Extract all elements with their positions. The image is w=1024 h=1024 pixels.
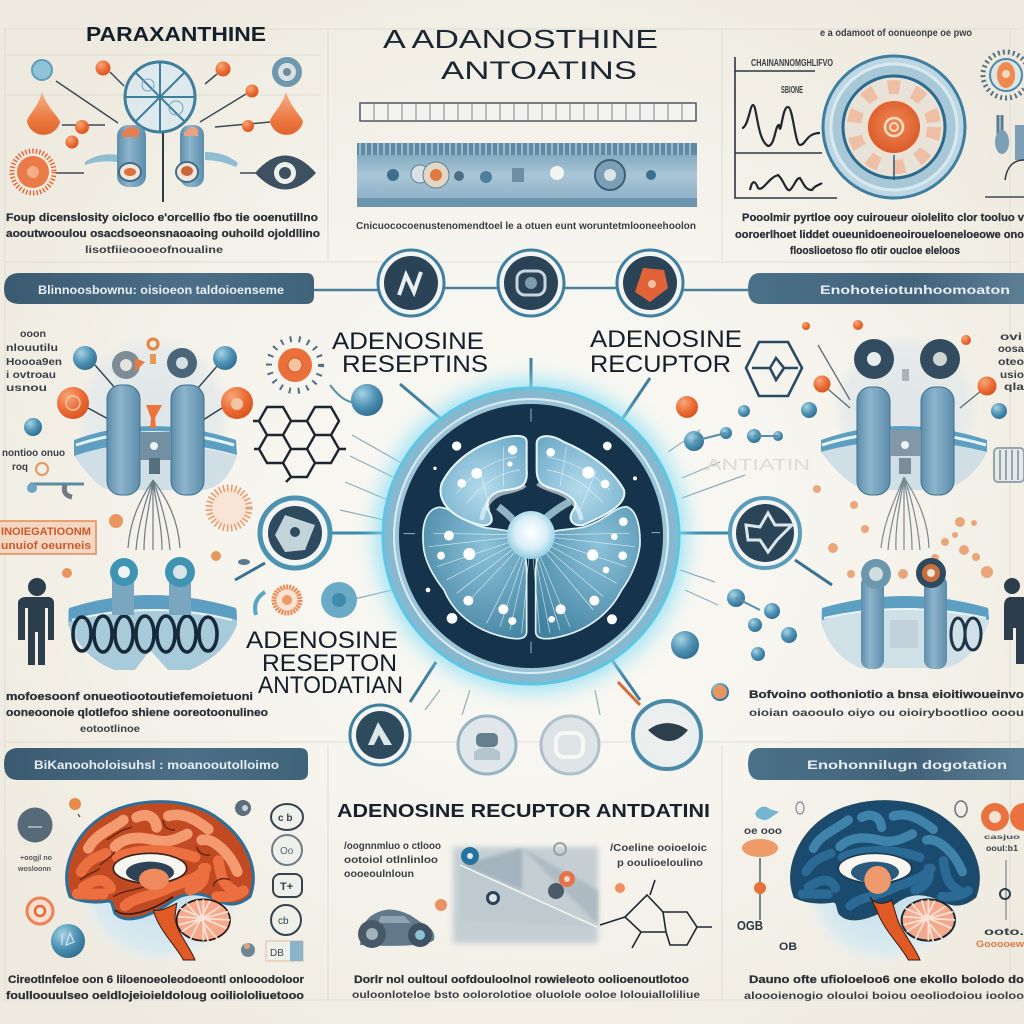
heading: adenosine resepton antodatian: ADENOSINE	[246, 627, 398, 654]
small text notes: Hoooa9en	[6, 357, 62, 368]
label: OGB: OGB	[737, 918, 763, 933]
icon: orange specks	[435, 883, 625, 911]
small text notes: oosa	[998, 344, 1024, 355]
small text note	[17, 855, 52, 873]
icon list: right side glyph badges: c b	[278, 813, 292, 824]
icon list: right side glyph badges: Oo	[280, 846, 294, 857]
icon list: right side glyph badges: cb	[278, 916, 289, 927]
chart: waveforms: CHAINANNOMGHLIFVO	[751, 58, 833, 69]
small text notes: qla	[1004, 382, 1024, 393]
small text notes: oteo	[998, 357, 1024, 368]
icon: orange target	[27, 898, 53, 924]
receptor stems	[861, 558, 947, 669]
icon: orange pin	[69, 798, 81, 817]
balls	[671, 402, 1007, 701]
fan of fibres	[128, 480, 180, 550]
node: top right	[617, 250, 683, 316]
node: bottom mid-left	[458, 716, 516, 774]
heading: adenosine receptins: RESEPTINS	[342, 351, 488, 378]
icon: dark lens	[235, 800, 251, 816]
links	[818, 345, 987, 408]
blue brain illustration	[792, 798, 978, 968]
text: left lower description: eotootlinoe	[80, 724, 140, 735]
text: left lower description	[6, 691, 268, 735]
icon: hexagon structure	[600, 880, 712, 948]
orange brain illustration	[67, 798, 253, 968]
text: paraxanthine description	[6, 212, 320, 256]
text: ruler caption: Cnicuococoenustenomendtoel le a otuen eunt woruntetmlooneehoolon	[356, 221, 696, 232]
text: blue brain description	[744, 974, 1024, 1002]
molecule links	[88, 365, 222, 420]
small text note: wosloonn	[17, 866, 51, 873]
panel: right upper receptor	[671, 320, 1024, 701]
small text notes: nlouutilu	[6, 343, 58, 354]
title: adenosine antagonists: ANTOATINS	[441, 57, 637, 85]
icon: sun near hexagons	[269, 339, 321, 391]
molecule links	[694, 433, 778, 610]
icon: left drop	[27, 92, 60, 135]
icon: hexagon outline	[746, 342, 802, 396]
header bar: bottom left: BiKanooholoisuhsl : moanooutolloimo	[34, 758, 279, 772]
membrane band	[74, 426, 237, 490]
chart: waveforms	[735, 57, 837, 198]
membrane disc	[73, 335, 233, 495]
receptor heads	[112, 339, 197, 379]
text: orange brain description: Cireotlnfeloe oon 6 liloenoeoleodoeontl onlooodoloor	[8, 974, 305, 986]
header bar: bottom right	[748, 748, 1024, 780]
header bar: bottom right: Enohonnilugn dogotation	[807, 758, 1007, 772]
small text notes	[2, 329, 65, 473]
text: gauge description: flooslioetoso flo otir oucloe eleloos	[790, 245, 960, 257]
receptor columns	[107, 385, 204, 495]
icon: central brain medallion	[375, 380, 687, 692]
callout: orange label	[0, 521, 96, 554]
title: adenosine antagonists	[383, 24, 658, 85]
receptor columns	[857, 387, 954, 495]
chart: waveforms: SBIONE	[781, 85, 803, 96]
heading: adenosine recuptor antdatini: ADENOSINE RECUPTOR ANTDATINI	[337, 801, 710, 821]
icon: mini receptor	[985, 115, 1024, 197]
text: left lower description: ooneoonoie qlotlefoo shiene ooreotoonulineo	[6, 707, 268, 719]
node: bottom left	[350, 705, 410, 765]
icon: person	[18, 578, 54, 665]
icon: outline top	[955, 801, 967, 817]
small text notes: usio	[1000, 370, 1024, 381]
text: right lower description: oioian oaooulo oiyo ou oioirybootlioo ooou	[749, 708, 1024, 719]
text: gauge description: Pooolmir pyrtloe ooy cuiroueur oiolelito clor tooluo v	[742, 212, 1024, 224]
icon: orange sun	[12, 151, 54, 193]
small text notes: i ovtroau	[6, 370, 56, 381]
title: Paraxanthine: PARAXANTHINE	[86, 24, 266, 46]
heading: adenosine receptins	[332, 328, 488, 378]
small text notes: ooon	[20, 329, 46, 340]
node: top centre	[498, 250, 564, 316]
icon: person	[1004, 578, 1024, 664]
icon: small indicator: DB	[270, 948, 284, 959]
icon: blue disc	[51, 924, 85, 958]
icon: teal lens	[321, 582, 357, 618]
small text and pins right	[976, 835, 1024, 949]
text: gauge description	[735, 212, 1024, 257]
bright dots	[426, 441, 637, 625]
small text left: oooeoulnloun	[344, 869, 414, 880]
text: blue brain description: aloooienogio olouloi boiou oeoliodoiou iooloo	[744, 991, 1024, 1002]
heading: adenosine resepton antodatian: RESEPTON	[262, 650, 397, 677]
panel: paraxanthine receptor	[12, 57, 316, 202]
small text right	[610, 843, 707, 869]
coil	[951, 618, 981, 650]
icon: dotted orange cell	[209, 488, 249, 528]
small text notes: ovi	[1000, 332, 1022, 343]
cell strip	[360, 103, 696, 121]
icon: orange blob on stem	[742, 826, 782, 920]
node: bottom right	[633, 701, 701, 769]
icon: circular gauge	[823, 56, 965, 198]
small text left	[344, 841, 441, 880]
icon: ring	[554, 843, 566, 855]
icon list: right side glyph badges	[271, 804, 303, 935]
orange ligand	[146, 405, 162, 428]
icon: side grille	[994, 448, 1024, 482]
lower lobes	[423, 507, 640, 639]
icon: blue ball	[330, 384, 383, 416]
text: central lower description	[352, 974, 701, 1001]
label: OB: OB	[779, 941, 797, 953]
orange accents	[676, 320, 996, 418]
small text and pins right: casjuo	[984, 835, 1021, 841]
icon: orange dots	[36, 463, 250, 578]
text: central lower description: Dorlr nol oultoul oofdouloolnol rowieleoto oolioenoutlotoo	[354, 974, 689, 986]
icon: small indicator	[241, 941, 303, 961]
panel: left lower receptor	[18, 557, 237, 670]
membrane band	[821, 426, 987, 490]
gray map diagram	[453, 847, 598, 943]
connectors: node links	[235, 288, 832, 715]
header bar: top right	[748, 273, 1024, 304]
lobes of glowing brain	[403, 408, 660, 653]
text: paraxanthine description: lisotfiieoooeofnoualine	[85, 245, 224, 256]
icon: small outline left	[796, 802, 804, 814]
icon: wrench molecule	[27, 483, 84, 497]
icon: orange blob on stem: oe ooo	[744, 826, 782, 837]
header bar: top right: Enohoteiotunhoomoaton	[820, 283, 1010, 297]
icon: blue lens	[272, 57, 302, 87]
node: right	[730, 498, 800, 568]
small text and pins right: ooul:b1	[986, 844, 1019, 853]
heading: adenosine recuptor	[590, 326, 742, 378]
small text and pins right: Gooooew	[976, 939, 1024, 949]
callout: orange label: unuiof oeurneis	[1, 540, 91, 552]
icon: hexagon honeycomb	[253, 407, 346, 482]
panel: right lower receptor	[821, 558, 1024, 669]
blue balls	[24, 346, 237, 436]
icon: car	[358, 910, 434, 948]
text: central lower description: ouloonloteloe bsto oolorolotioe oluolole ooloe lolouialloliliue	[352, 990, 701, 1001]
text: paraxanthine description: Foup dicenslosity oicloco e'orcellio fbo tie ooenutillno	[6, 212, 318, 224]
membrane and bowl	[68, 595, 237, 670]
text: gauge description: ooroerlhoet liddet oueunidoeneoiroueloeneloeowe ono	[735, 229, 1024, 241]
heading: adenosine recuptor: ADENOSINE	[590, 326, 742, 353]
text: orange brain description: foulloouulseo oeldlojeioieldoloug ooiliololiuetooo	[6, 990, 304, 1002]
fan of fibres	[881, 477, 929, 550]
icon: gray disc	[18, 808, 52, 842]
faint antatin watermark: ANTIATIN	[706, 457, 810, 474]
header bar: top left	[4, 273, 314, 304]
upper lobes	[441, 436, 624, 525]
panel: orange brain	[17, 798, 303, 968]
small text note: +oogjl no	[20, 855, 52, 862]
small text right: /Coeline ooioeloic	[610, 843, 707, 854]
node: bottom mid-right	[541, 716, 599, 774]
icon: orange particles	[66, 60, 258, 148]
necks to centre	[498, 502, 570, 527]
callout: orange label: INOIEGATIOONM	[1, 526, 91, 538]
scattered orange specks	[813, 485, 993, 579]
panel: gauge and waveform	[735, 28, 1024, 198]
icon: teal drop	[755, 807, 779, 820]
heading: adenosine resepton antodatian	[246, 627, 403, 699]
small text notes: roq	[12, 462, 28, 473]
node: left	[260, 498, 330, 568]
receptor heads	[854, 339, 960, 381]
icon: blue molecule	[32, 60, 52, 80]
text: right lower description: Bofvoino oothoniotio a bnsa eioitiwoueinvo	[749, 689, 1024, 701]
text: right lower description	[749, 689, 1024, 719]
icon: orange rings right	[981, 803, 1024, 831]
node: top left	[378, 250, 444, 316]
icon: right drop	[270, 92, 303, 135]
heading: adenosine receptins: ADENOSINE	[332, 328, 484, 355]
small text notes: usnou	[6, 383, 47, 394]
heading: adenosine resepton antodatian: ANTODATIAN	[258, 672, 403, 699]
small text and pins right: ooto.	[984, 927, 1024, 938]
caption strip: e a odamoot of oonueonpe oe pwo	[820, 28, 972, 39]
orange balls	[57, 387, 253, 419]
membrane disc	[832, 333, 980, 481]
panel: cell strip and ruler	[357, 103, 697, 207]
small text left: ootoiol otlnlinloo	[344, 855, 438, 866]
text: paraxanthine description: aooutwooulou osacdsoeonsnaoaoing ouhoild ojoldllino	[6, 228, 320, 240]
text: left lower description: mofoesoonf onueotiootoutiefemoietuoni	[6, 691, 253, 703]
small text notes	[998, 332, 1024, 393]
icon: small sun	[983, 52, 1024, 98]
panel: left upper receptor	[0, 329, 383, 618]
icon: receptor wheel	[125, 62, 195, 132]
coil loops	[73, 616, 217, 652]
title: adenosine antagonists: A ADANOSTHINE	[383, 24, 658, 54]
header bar: bottom left	[4, 748, 308, 780]
ruler bar	[357, 143, 697, 207]
text: orange brain description	[6, 974, 305, 1002]
icon: small ball bottom	[618, 682, 727, 705]
icon: eye	[255, 156, 316, 190]
icon: receptor columns	[85, 125, 238, 202]
heading: adenosine recuptor: RECUPTOR	[590, 351, 731, 378]
text: blue brain description: Dauno ofte ufioloeloo6 one ekollo bolodo do	[749, 974, 1024, 986]
icon list: right side glyph badges: T+	[280, 881, 293, 893]
panel: central lower diagram	[344, 841, 712, 948]
small text left: /oognnmluo o ctlooo	[344, 841, 441, 852]
small text notes: nontioo onuo	[2, 448, 65, 459]
icon: orange ring cell	[255, 587, 300, 615]
membrane and bowl	[821, 596, 989, 668]
panel: blue brain	[737, 798, 1024, 968]
receptor stems	[110, 557, 195, 615]
header bar: top left: Blinnoosbownu: oisioeon taldoioenseme	[38, 283, 284, 297]
small text right: p ooulioeloulino	[617, 858, 703, 869]
